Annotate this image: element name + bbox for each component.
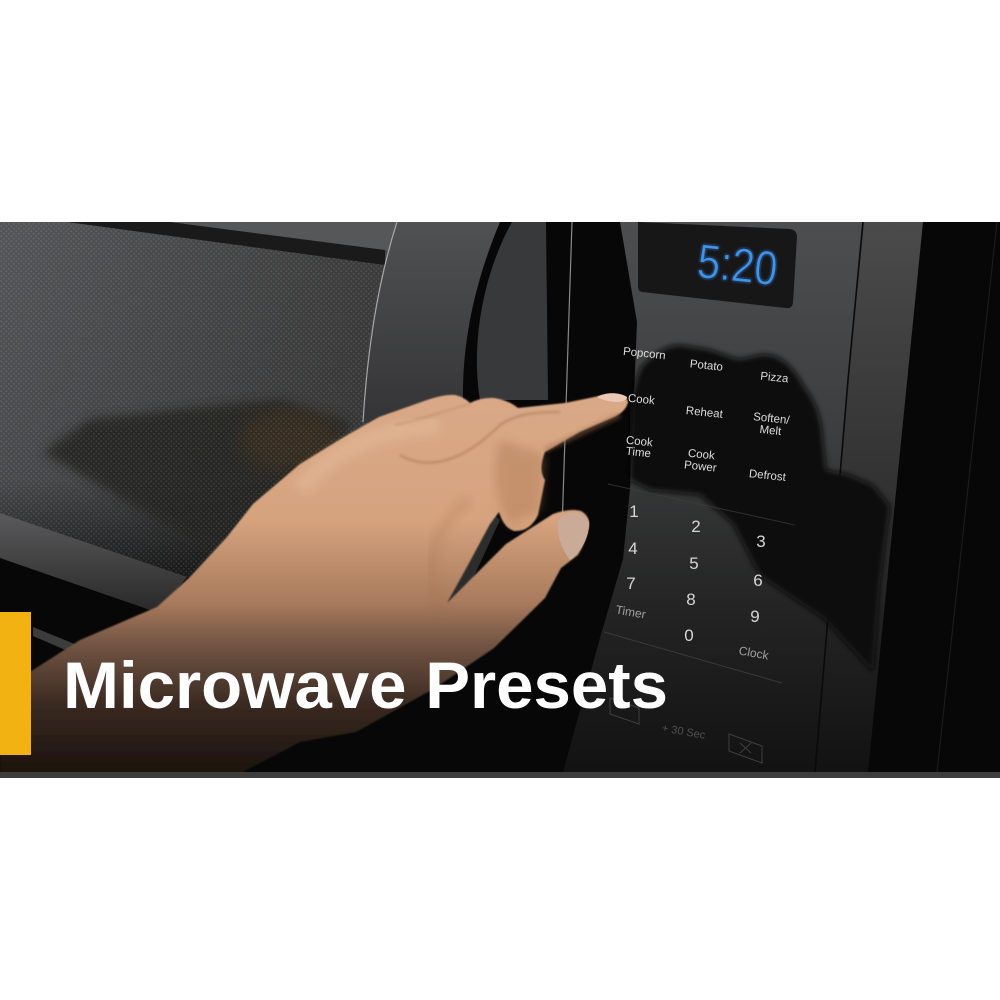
number pad: 3 xyxy=(756,532,766,551)
keypad dividers and bottom buttons xyxy=(604,484,795,763)
number pad: 5 xyxy=(689,554,699,573)
number pad: Clock xyxy=(738,644,771,663)
hand xyxy=(0,393,628,780)
microwave window with mesh xyxy=(0,222,400,590)
infographic canvas xyxy=(0,222,1000,778)
preset button labels: Pizza xyxy=(760,371,790,386)
number pad: 1 xyxy=(629,502,639,521)
hand reflection in panel xyxy=(630,345,890,672)
number pad: 6 xyxy=(753,571,763,590)
preset button labels: Cook xyxy=(625,435,654,449)
number pad: 9 xyxy=(750,607,760,626)
fingernails xyxy=(597,393,627,402)
number pad: 2 xyxy=(691,517,701,536)
control panel xyxy=(563,222,997,772)
preset button labels: Soften/ xyxy=(753,411,791,427)
yellow accent bar xyxy=(0,612,31,755)
number pad: 8 xyxy=(686,590,696,609)
preset button labels: Melt xyxy=(759,424,783,438)
preset button labels: Cook xyxy=(627,393,656,407)
lower door frame xyxy=(0,513,187,652)
knuckle highlights and creases xyxy=(300,425,440,490)
preset button labels: Potato xyxy=(689,358,723,374)
preset button labels: Reheat xyxy=(685,405,724,421)
door handle xyxy=(363,222,572,610)
title: Microwave Presets xyxy=(63,648,668,722)
preset button labels: Power xyxy=(683,459,717,475)
number pad: Timer xyxy=(615,603,647,622)
number pad: 4 xyxy=(628,539,638,558)
preset button labels: Defrost xyxy=(748,468,787,484)
number pad: 0 xyxy=(684,626,694,645)
photo: hand pressing microwave preset button xyxy=(0,222,1000,780)
preset button labels xyxy=(622,346,791,484)
bottom grey strip xyxy=(0,772,1000,778)
number pad: + 30 Sec xyxy=(661,722,707,742)
display digits: 5:20 xyxy=(695,235,780,296)
display window xyxy=(638,222,797,308)
preset button labels: Popcorn xyxy=(622,346,666,362)
preset button labels: Time xyxy=(625,446,651,460)
number pad xyxy=(615,502,771,742)
number pad: 7 xyxy=(626,574,636,593)
preset button labels: Cook xyxy=(687,448,716,462)
